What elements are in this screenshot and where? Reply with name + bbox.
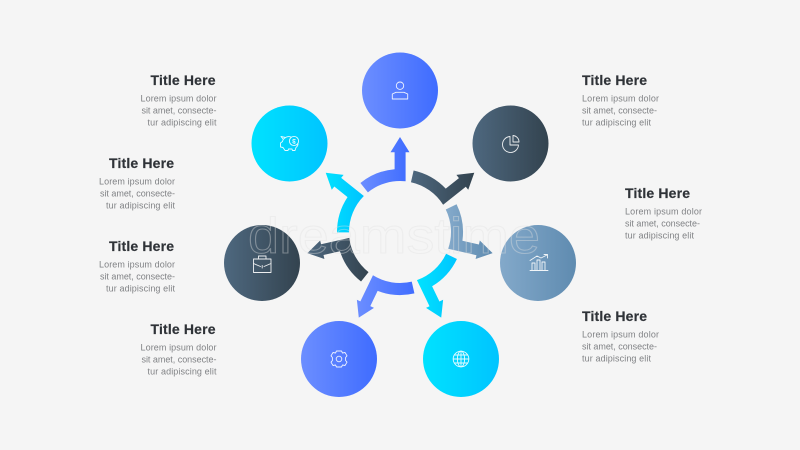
- text block: middle right: [625, 185, 702, 240]
- text block: top left: Lorem ipsum dolor: [140, 94, 216, 104]
- arrow segment: bottom blue: [350, 264, 419, 335]
- text block: middle right: sit amet, consecte-: [625, 218, 700, 228]
- circle: top blue with user icon: [362, 52, 438, 128]
- circle: top right dark with pie icon: [472, 106, 548, 182]
- circle: left dark with briefcase icon: [224, 225, 300, 301]
- text block: bottom right: [582, 308, 659, 364]
- icon: pie chart: [503, 136, 519, 152]
- watermark: dreamstime: [248, 208, 540, 264]
- text block: top left: sit amet, consecte-: [142, 106, 216, 116]
- text block: top left: Title Here: [150, 72, 216, 88]
- circle: top left cyan with piggy bank icon: [252, 106, 328, 182]
- text block: middle right: tur adipiscing elit: [625, 230, 694, 240]
- circle: right steel with growth chart icon: [500, 225, 576, 301]
- text block: top right: tur adipiscing elit: [582, 118, 651, 128]
- icon: growth chart: [530, 254, 548, 270]
- text block: bottom left: tur adipiscing elit: [148, 366, 217, 376]
- text block: top right: Lorem ipsum dolor: [582, 94, 659, 104]
- text block: lower middle left: sit amet, consecte-: [100, 272, 175, 282]
- arrow segment: top left cyan: [301, 165, 375, 238]
- arrow segment: right steel: [436, 202, 501, 262]
- icon: user: [392, 82, 408, 99]
- text block: upper middle left: sit amet, consecte-: [100, 188, 175, 198]
- icon: piggy bank: [280, 136, 299, 150]
- text block: top right: Title Here: [582, 72, 647, 88]
- text block: top right: sit amet, consecte-: [582, 106, 657, 116]
- circle: bottom left blue with gear icon: [301, 321, 377, 397]
- text block: bottom right: Lorem ipsum dolor: [582, 330, 659, 340]
- text block: middle right: Lorem ipsum dolor: [625, 206, 702, 216]
- text block: bottom left: Lorem ipsum dolor: [140, 342, 216, 352]
- text block: bottom left: [140, 321, 217, 376]
- text block: lower middle left: [99, 238, 175, 294]
- arrow segment: top blue: [360, 137, 410, 192]
- text block: lower middle left: Title Here: [109, 238, 174, 254]
- text block: bottom left: Title Here: [150, 321, 216, 337]
- text block: upper middle left: Title Here: [109, 155, 174, 171]
- arrow segment: bottom right cyan: [409, 251, 477, 322]
- text block: bottom right: sit amet, consecte-: [582, 342, 657, 352]
- text block: top left: tur adipiscing elit: [148, 118, 217, 128]
- circle: bottom right cyan with globe icon: [423, 321, 499, 397]
- text block: top right: [582, 72, 659, 128]
- text block: upper middle left: Lorem ipsum dolor: [99, 176, 175, 186]
- text block: middle right: Title Here: [625, 185, 690, 201]
- arrow ring: [301, 137, 501, 335]
- text block: bottom left: sit amet, consecte-: [142, 354, 216, 364]
- text block: bottom right: tur adipiscing elit: [582, 354, 651, 364]
- icon: globe: [453, 351, 469, 367]
- text block: lower middle left: tur adipiscing elit: [106, 284, 175, 294]
- arrow segment: top right dark: [406, 142, 480, 215]
- text block: upper middle left: tur adipiscing elit: [106, 200, 175, 210]
- arrow segment: left dark: [305, 232, 370, 292]
- text block: bottom right: Title Here: [582, 308, 647, 324]
- text block: upper middle left: [99, 155, 175, 210]
- text block: top left: [140, 72, 217, 128]
- text block: lower middle left: Lorem ipsum dolor: [99, 260, 175, 270]
- icon: briefcase: [254, 256, 271, 272]
- icon: gear: [331, 351, 347, 367]
